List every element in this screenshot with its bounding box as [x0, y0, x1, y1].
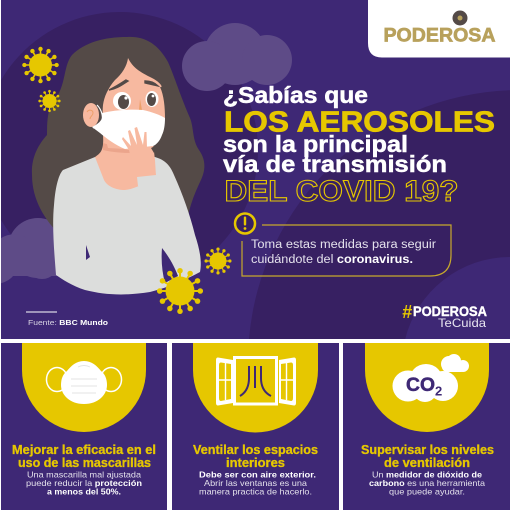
- eyes: [113, 92, 131, 110]
- icon: window: [216, 358, 296, 406]
- panel: supervisar: que puede ayudar.: [389, 486, 465, 496]
- panel: mascarillas: a menos del 50%.: [47, 486, 121, 496]
- panel: ventilar: [172, 343, 339, 510]
- hashtag: TeCuida: [438, 316, 486, 330]
- title: DEL COVID 19?: [224, 175, 458, 208]
- yellow circle: [365, 343, 489, 432]
- panel: mascarillas: uso de las mascarillas: [18, 456, 151, 470]
- arm gaps: [86, 245, 90, 260]
- panel: supervisar: carbono es una herramienta: [369, 478, 485, 488]
- ear: [83, 103, 99, 127]
- hashtag: #: [402, 302, 412, 322]
- icon: CO2 cloud: [392, 354, 469, 402]
- virus: top large: [22, 47, 59, 83]
- virus: bottom large: [157, 268, 203, 314]
- title: [223, 82, 495, 208]
- panel: supervisar: [343, 343, 510, 510]
- yellow circle: [22, 343, 146, 432]
- panel: ventilar: Abrir las ventanas es una: [204, 478, 307, 488]
- hair: [32, 37, 204, 235]
- neck and chest: [95, 135, 156, 190]
- panel: ventilar: interiores: [226, 456, 285, 470]
- icon: CO2 cloud: CO: [406, 374, 435, 396]
- hair sliver: [151, 146, 155, 153]
- heading: Mejorar la eficacia en el: [12, 443, 156, 457]
- hand: [122, 127, 156, 177]
- body: Una mascarilla mal ajustada: [27, 470, 141, 480]
- sleeve: [137, 175, 157, 190]
- source: [26, 312, 108, 327]
- hashtag: [402, 302, 487, 330]
- virus: top small: [38, 90, 61, 112]
- body: Debe ser con aire exterior.: [199, 470, 316, 480]
- body: Un medidor de dióxido de: [372, 470, 482, 480]
- source: Fuente: BBC Mundo: [28, 318, 108, 327]
- cloud: upper: [182, 23, 292, 91]
- icon: face mask: [46, 361, 122, 404]
- cloud: lower: [1, 218, 68, 283]
- heading: Ventilar los espacios: [193, 443, 318, 457]
- virus: right small: [204, 247, 232, 275]
- logo wordmark: PODEROSA: [384, 24, 496, 46]
- yellow circle: [193, 343, 318, 432]
- sweater: [53, 157, 201, 294]
- face: [103, 58, 165, 150]
- callout text: Toma estas medidas para seguir: [251, 239, 436, 251]
- nose: [139, 99, 142, 110]
- title: vía de transmisión: [223, 151, 447, 177]
- panel: supervisar: de ventilación: [384, 456, 470, 470]
- eyebrows: [109, 80, 128, 90]
- title: son la principal: [223, 131, 408, 157]
- mask: [92, 110, 165, 149]
- panel: mascarillas: puede reducir la protección: [26, 478, 142, 488]
- icon: CO2 cloud: 2: [435, 384, 442, 398]
- panel: hero background: [1, 0, 510, 339]
- title: LOS AEROSOLES: [224, 106, 495, 138]
- panel: ventilar: manera practica de hacerlo.: [199, 486, 312, 496]
- callout: cuidándote del coronavirus.: [251, 254, 413, 266]
- title: ¿Sabías que: [223, 82, 368, 108]
- illustration: woman with mask: [32, 37, 204, 294]
- hashtag: PODEROSA: [413, 303, 487, 319]
- callout: [235, 214, 451, 276]
- panel: mascarillas: [1, 343, 167, 510]
- heading: Supervisar los niveles: [361, 443, 494, 457]
- logo mark: [452, 10, 468, 26]
- neck shadow: [103, 143, 152, 153]
- logo card: [368, 0, 510, 58]
- icon: alert: [235, 214, 255, 234]
